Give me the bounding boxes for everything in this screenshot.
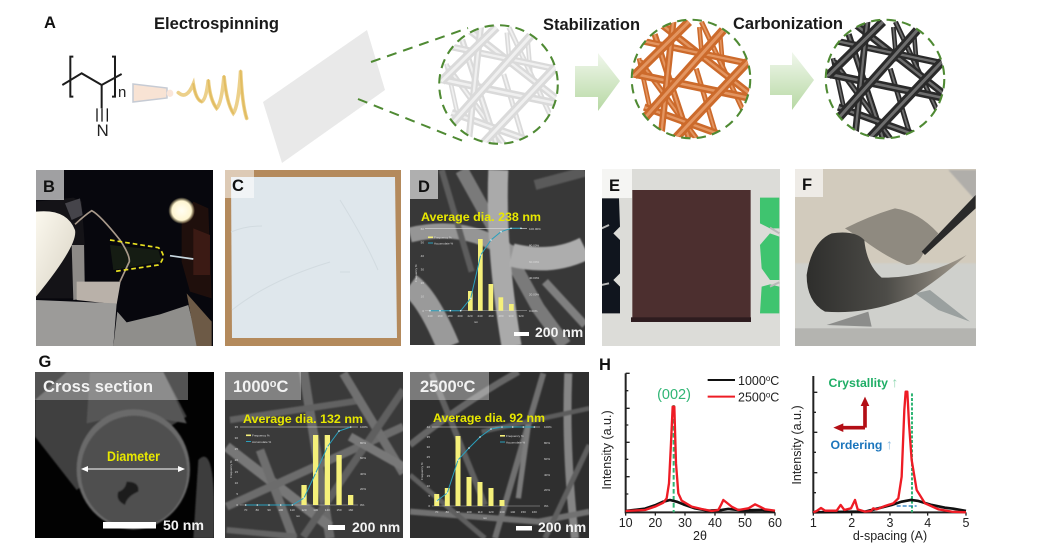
legend labels — [738, 374, 779, 404]
scale bar 50 nm — [103, 517, 204, 533]
histogram 1000C: 120 — [301, 508, 307, 512]
diameter label: Diameter — [107, 449, 161, 464]
chemical structure: polyacrylonitrile — [62, 57, 126, 140]
label tab F — [795, 169, 823, 197]
arrow: to carbonization — [770, 52, 814, 110]
icon: fiber jet spiral — [167, 71, 247, 118]
histogram 2500C: 40% — [544, 473, 550, 477]
axis tick labels: 30 — [678, 516, 692, 530]
panel D: SEM with diameter histogram — [410, 170, 585, 345]
histogram 1000C: Frequency % — [229, 460, 233, 478]
y axis title: Intensity (a.u.) — [790, 405, 804, 485]
icon: spinning nozzle — [133, 84, 167, 102]
histogram 1000C: 140 — [325, 508, 330, 512]
histogram 1000C: 10 — [235, 481, 238, 485]
histogram 2500C: 20% — [544, 488, 550, 492]
histogram 2500C: 5 — [428, 494, 430, 498]
average diameter text: Average dia. 238 nm — [421, 210, 541, 224]
histogram 1000C: 30 — [235, 436, 238, 440]
circle: carbonized black fibers — [826, 20, 944, 138]
zoom guide lines — [358, 28, 468, 143]
label tab E — [602, 169, 632, 198]
histogram 2500C: Frequency % — [420, 462, 424, 480]
label tab 1000C — [225, 372, 301, 400]
histogram D: 20 — [421, 281, 424, 285]
histogram D: 60.00% — [529, 260, 540, 264]
label tab D — [410, 170, 438, 199]
histogram 2500C: 70 — [435, 510, 439, 514]
chart H left: XRD 2 theta — [600, 373, 782, 543]
histogram D: Accumulate % — [434, 242, 454, 246]
histogram D: 0.00% — [529, 309, 538, 313]
axis tick labels — [810, 516, 970, 530]
label tab 2500C: C — [463, 378, 475, 396]
histogram 2500C: 140 — [510, 510, 516, 514]
histogram D: 100.00% — [529, 227, 541, 231]
histogram 2500C: 130 — [499, 510, 505, 514]
histogram 2500C: 120 — [488, 510, 494, 514]
histogram 2500C: 20 — [427, 465, 430, 469]
histogram D: 40.00% — [529, 276, 540, 280]
histogram D: 180 — [447, 314, 453, 318]
scale bar 50 nm: 50 nm — [163, 517, 204, 533]
arrow: diameter — [81, 466, 185, 472]
histogram D: 240 — [477, 314, 483, 318]
panel F: flexible carbon sheet photo — [795, 169, 976, 346]
histogram 2500C: 150 — [521, 510, 526, 514]
histogram 1000C: 70 — [244, 508, 248, 512]
label tab 1000C: o — [270, 378, 277, 390]
axis tick labels: 20 — [648, 516, 662, 530]
histogram 1000C: 20 — [235, 458, 238, 462]
label tab D: D — [418, 178, 430, 196]
histogram D: 320 — [518, 314, 524, 318]
axis tick labels: 1 — [810, 516, 817, 530]
histogram D: 280 — [498, 314, 504, 318]
axis tick labels: 4 — [924, 516, 931, 530]
histogram 1000C — [229, 425, 368, 518]
histogram 2500C: 35 — [427, 435, 430, 439]
annotation: crystallity: Crystallity ↑ — [828, 374, 898, 390]
histogram 2500C: 100% — [544, 425, 552, 429]
legend labels: 2500 — [738, 390, 766, 404]
histogram 2500C: 80% — [544, 441, 550, 445]
histogram 2500C: nm — [483, 516, 488, 520]
label tab 1000C: 1000 — [233, 378, 270, 396]
histogram 1000C: 0% — [360, 503, 365, 507]
histogram D: 300 — [508, 314, 514, 318]
y axis title: Intensity (a.u.) — [600, 410, 614, 490]
panel B: electrospinning photo — [36, 170, 213, 346]
histogram 1000C: 15 — [235, 470, 238, 474]
scale bar 1000C: 200 nm — [352, 519, 400, 535]
histogram 1000C: 40% — [360, 472, 366, 476]
panel label A: A — [44, 14, 56, 32]
histogram D: 0 — [422, 309, 424, 313]
histogram 1000C: 130 — [313, 508, 319, 512]
label tab 2500C: 2500 — [420, 378, 457, 396]
panel G3: 2500C SEM with histogram — [410, 372, 589, 538]
histogram 1000C: nm — [296, 514, 301, 518]
histogram 2500C: 110 — [478, 510, 483, 514]
histogram D: 30 — [421, 268, 424, 272]
axis tick labels: 5 — [963, 516, 970, 530]
histogram 2500C: 25 — [427, 455, 430, 459]
collected fiber sheet — [263, 30, 385, 163]
label tab B: B — [43, 178, 55, 196]
heading: Electrospinning: Electrospinning — [154, 14, 279, 33]
histogram D: 140 — [427, 314, 433, 318]
axis tick labels: 3 — [887, 516, 894, 530]
legend labels: C — [770, 374, 779, 388]
panel A: fabrication schematic — [44, 14, 944, 163]
histogram 2500C: 15 — [427, 474, 430, 478]
histogram 1000C: 80 — [256, 508, 259, 512]
arrows: crystallity and ordering directions — [833, 397, 869, 432]
histogram D: 220 — [467, 314, 473, 318]
label tab E: E — [609, 177, 620, 195]
heading: Stabilization: Stabilization — [543, 16, 640, 34]
scale bar 2500C: 200 nm — [538, 519, 586, 535]
histogram 1000C: 5 — [236, 492, 238, 496]
histogram 2500C: 80 — [446, 510, 449, 514]
histogram D — [414, 227, 541, 324]
label tab B — [36, 170, 64, 200]
histogram 1000C: Frequency % — [252, 434, 270, 438]
label tab C — [225, 170, 254, 198]
legend labels: C — [770, 390, 779, 404]
average diameter text: Average dia. 132 nm — [243, 412, 363, 426]
histogram 2500C: 0% — [544, 504, 549, 508]
annotation: ordering: Ordering ↑ — [830, 436, 893, 452]
histogram 1000C: 80% — [360, 441, 366, 445]
histogram D: 260 — [488, 314, 494, 318]
panel E: carbon sheet in holder — [602, 169, 780, 346]
chemical structure: polyacrylonitrile: n — [118, 84, 126, 101]
histogram 2500C: 40 — [427, 425, 430, 429]
peak label (002): (002) — [657, 387, 691, 403]
arrow: to stabilization — [575, 53, 620, 111]
histogram D: 160 — [437, 314, 443, 318]
histogram 1000C: 100% — [360, 425, 368, 429]
legend labels: 1000 — [738, 374, 766, 388]
scale bar D — [514, 324, 583, 340]
panel G1: cross section SEM — [35, 372, 214, 538]
panel C: fiber mat photo — [225, 170, 401, 346]
panel G2: 1000C SEM with histogram — [225, 372, 403, 538]
histogram D: 60 — [421, 227, 424, 231]
histogram D: 200 — [457, 314, 463, 318]
histogram D: Frequency % — [414, 264, 418, 282]
histogram 1000C: Accumulate % — [252, 440, 272, 444]
panel label H: H — [599, 356, 611, 374]
histogram 2500C: 160 — [532, 510, 537, 514]
histogram 2500C: 100 — [466, 510, 472, 514]
histogram D: 40 — [421, 254, 424, 258]
label tab 2500C: o — [457, 378, 464, 390]
histogram D: 50 — [421, 240, 424, 244]
histogram 1000C: 60% — [360, 456, 366, 460]
histogram D: Frequency % — [434, 236, 452, 240]
histogram 2500C: 0 — [428, 504, 430, 508]
histogram 1000C: 110 — [290, 508, 295, 512]
histogram 2500C — [420, 425, 552, 520]
label tab 2500C — [410, 372, 489, 400]
x axis title: 2θ — [693, 529, 707, 543]
histogram 2500C: 10 — [427, 484, 430, 488]
average diameter text: Average dia. 92 nm — [433, 411, 545, 425]
histogram 1000C: 150 — [336, 508, 342, 512]
label tab F: F — [802, 176, 812, 194]
histogram 2500C: 90 — [456, 510, 460, 514]
scale bar 1000C — [328, 519, 400, 535]
axis tick labels: 50 — [738, 516, 752, 530]
axis tick labels: 2 — [848, 516, 855, 530]
circle: stabilized orange fibers — [632, 20, 750, 138]
histogram D: 10 — [421, 294, 424, 298]
histogram 1000C: 35 — [235, 425, 238, 429]
circle: electrospun white fibers — [439, 25, 558, 144]
histogram 1000C: 25 — [235, 447, 238, 451]
histogram 1000C: 160 — [348, 508, 354, 512]
histogram D: 80.00% — [529, 244, 540, 248]
histogram 1000C: 20% — [360, 487, 366, 491]
label tab C: C — [232, 177, 244, 195]
panel label G: G — [38, 353, 51, 371]
legend labels: o — [766, 390, 771, 400]
axis tick labels: 40 — [708, 516, 722, 530]
scale bar 2500C — [516, 519, 586, 535]
histogram D: nm — [474, 320, 479, 324]
x axis title: d-spacing (A) — [853, 529, 927, 543]
histogram 1000C: 90 — [267, 508, 271, 512]
label tab cross section — [35, 372, 188, 400]
histogram 2500C: 30 — [427, 445, 430, 449]
histogram 1000C: 0 — [236, 503, 238, 507]
label tab cross section: Cross section — [43, 378, 153, 396]
histogram 2500C: 60% — [544, 457, 550, 461]
histogram 2500C: Accumulate % — [506, 440, 526, 444]
chart H right: d-spacing — [790, 374, 970, 543]
heading: Carbonization: Carbonization — [733, 15, 843, 33]
axis tick labels — [619, 516, 782, 530]
scale bar D: 200 nm — [535, 324, 583, 340]
histogram 2500C: Frequency % — [506, 434, 524, 438]
histogram D: 20.00% — [529, 292, 540, 296]
axis tick labels: 10 — [619, 516, 633, 530]
chemical structure: polyacrylonitrile: N — [96, 121, 109, 140]
legend labels: o — [766, 374, 771, 383]
axis tick labels: 60 — [768, 516, 782, 530]
label tab 1000C: C — [276, 378, 288, 396]
histogram 1000C: 100 — [278, 508, 284, 512]
